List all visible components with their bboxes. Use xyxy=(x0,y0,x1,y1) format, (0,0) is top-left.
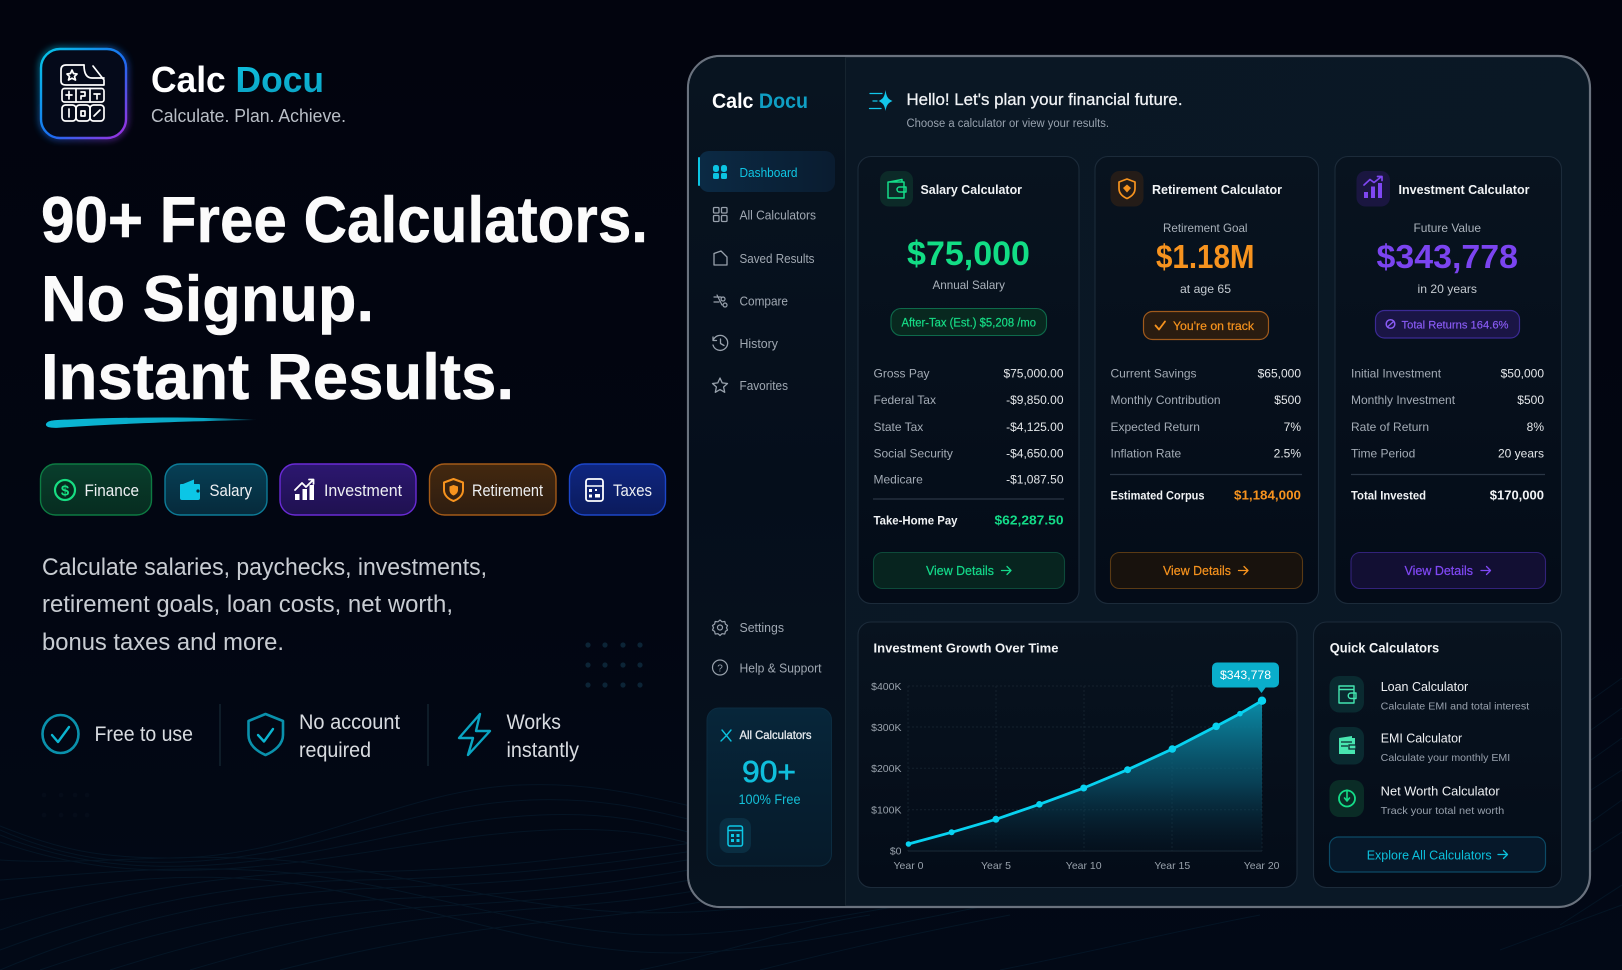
nav: All Calculators: All Calculators xyxy=(740,208,816,222)
investment rows: Time Period xyxy=(1351,446,1415,460)
feature: no account required: required xyxy=(299,738,371,762)
salary breakdown rows: Medicare xyxy=(874,472,923,486)
brand name: Calc Docu xyxy=(151,59,324,100)
nav: History xyxy=(713,335,779,351)
item: Loan Calculator: Loan Calculator xyxy=(1381,680,1468,694)
item: Net Worth Calculator: Net Worth Calculator xyxy=(1381,785,1500,799)
investment rows: $50,000 xyxy=(1501,366,1544,380)
feature: no account required: No account xyxy=(299,710,400,734)
nav: Saved Results xyxy=(714,251,814,266)
x axis labels: Year 15 xyxy=(1154,860,1190,872)
card: Investment Calculator: $343,778 xyxy=(1376,238,1518,275)
growth line xyxy=(906,696,1266,847)
pill: Salary xyxy=(165,464,267,515)
icon: shield xyxy=(1110,171,1144,206)
background wave lines xyxy=(0,678,1622,970)
retirement rows: Inflation Rate xyxy=(1110,446,1182,460)
greeting header xyxy=(870,90,1182,130)
item: Net Worth Calculator: Track your total net worth xyxy=(1381,805,1504,817)
greeting header: Hello! Let's plan your financial future. xyxy=(906,90,1182,109)
item: EMI Calculator xyxy=(1330,727,1510,764)
item: EMI Calculator: EMI Calculator xyxy=(1381,732,1462,746)
card: Retirement Calculator: Retirement Calculator xyxy=(1152,182,1282,197)
x axis labels: Year 5 xyxy=(981,860,1011,872)
feature: works instantly: instantly xyxy=(506,738,579,762)
investment rows: 8% xyxy=(1527,420,1544,434)
retirement rows: Monthly Contribution xyxy=(1110,393,1221,407)
calculator tile xyxy=(720,818,751,853)
estimated corpus: $1,184,000 xyxy=(1234,488,1301,502)
item: EMI Calculator: Calculate your monthly EMI xyxy=(1381,752,1510,764)
tagline: Calculate. Plan. Achieve. xyxy=(151,106,346,126)
y axis labels: $300K xyxy=(871,722,902,734)
nav: Compare xyxy=(714,294,788,308)
nav: Compare: Compare xyxy=(740,294,788,308)
nav: Help & Support: Help & Support xyxy=(740,662,822,676)
y axis labels: $400K xyxy=(871,681,902,693)
salary breakdown rows: -$1,087.50 xyxy=(1006,472,1064,486)
salary breakdown rows: -$9,850.00 xyxy=(1006,393,1064,407)
feature: no account required xyxy=(248,710,400,762)
sidebar brand: Calc Docu xyxy=(712,90,808,113)
total invested: Total Invested xyxy=(1351,488,1426,502)
nav: Dashboard active: Dashboard xyxy=(740,166,798,180)
y axis labels: $0 xyxy=(890,846,902,858)
card: Investment Calculator: in 20 years xyxy=(1418,282,1477,296)
item: Net Worth Calculator xyxy=(1330,780,1504,817)
investment rows: 20 years xyxy=(1498,446,1544,460)
card: Salary Calculator xyxy=(858,156,1079,604)
area under curve xyxy=(908,701,1262,851)
estimated corpus xyxy=(1110,488,1301,502)
button: view details: View Details xyxy=(1163,564,1231,578)
pill: Retirement: Retirement xyxy=(472,481,543,500)
salary breakdown rows: $75,000.00 xyxy=(1003,366,1064,380)
pill: Taxes xyxy=(570,464,666,515)
investment rows xyxy=(1351,366,1544,460)
button: explore all xyxy=(1330,837,1546,872)
investment rows: Monthly Investment xyxy=(1351,393,1456,407)
salary breakdown rows: Gross Pay xyxy=(874,366,930,380)
card: Retirement Calculator: $1.18M xyxy=(1156,238,1254,275)
description paragraph xyxy=(42,554,487,656)
sidebar xyxy=(689,57,846,906)
investment rows: Rate of Return xyxy=(1351,420,1429,434)
feature row xyxy=(42,704,579,766)
card: Salary Calculator: $75,000 xyxy=(907,235,1030,273)
item: Loan Calculator xyxy=(1330,676,1529,712)
description paragraph: Calculate salaries, paychecks, investments, xyxy=(42,554,487,581)
x axis labels xyxy=(894,860,1280,872)
nav: Settings: Settings xyxy=(740,621,784,635)
button: view details: View Details xyxy=(926,564,994,578)
pill: Investment: Investment xyxy=(324,481,402,500)
logo icon xyxy=(41,49,126,138)
tooltip: $343,778 xyxy=(1220,668,1271,682)
badge: total returns: Total Returns 164.6% xyxy=(1402,320,1509,332)
pill: Investment xyxy=(280,464,416,515)
grid xyxy=(908,686,1262,851)
investment rows: $500 xyxy=(1517,393,1544,407)
salary breakdown rows: -$4,650.00 xyxy=(1006,446,1064,460)
headline underline swoosh xyxy=(46,418,256,428)
greeting header: Choose a calculator or view your results. xyxy=(906,118,1109,130)
card: Investment Calculator: Investment Calculator xyxy=(1398,182,1530,197)
pill: Salary: Salary xyxy=(210,481,252,500)
retirement rows: $65,000 xyxy=(1258,366,1301,380)
nav: Help & Support: ? xyxy=(717,664,723,674)
headline xyxy=(41,183,648,413)
icon: growth chart xyxy=(1356,171,1390,206)
button: view details: View Details xyxy=(1404,564,1473,578)
all calculators card: 90+ xyxy=(742,754,796,789)
panel: investment growth chart: Investment Growth Over Time xyxy=(874,641,1058,656)
feature: free to use xyxy=(42,715,193,753)
retirement rows: 7% xyxy=(1284,420,1301,434)
all calculators card: 100% Free xyxy=(738,792,800,807)
pill: Retirement xyxy=(430,464,556,515)
y axis labels: $100K xyxy=(871,804,902,816)
pill: Finance: Finance xyxy=(84,481,139,500)
card: Salary Calculator: Salary Calculator xyxy=(920,182,1022,197)
badge: after-tax xyxy=(891,308,1046,336)
salary breakdown rows xyxy=(874,366,1064,486)
headline: 90+ Free Calculators. xyxy=(41,183,648,256)
card: Retirement Calculator: Retirement Goal xyxy=(1163,221,1248,235)
panel: investment growth chart xyxy=(858,622,1297,888)
dashboard panel xyxy=(688,56,1590,907)
salary breakdown rows: Social Security xyxy=(874,446,953,460)
nav: Settings xyxy=(712,620,784,636)
feature: works instantly: Works xyxy=(506,710,561,734)
all calculators card xyxy=(707,708,832,866)
y axis labels xyxy=(871,681,902,858)
button: view details xyxy=(1110,552,1302,588)
panel: quick calculators: Quick Calculators xyxy=(1330,641,1439,656)
pill: Taxes: Taxes xyxy=(613,481,652,500)
button: view details xyxy=(1351,552,1546,588)
icon: wallet xyxy=(880,171,913,206)
card: Investment Calculator: Future Value xyxy=(1414,221,1481,235)
y axis labels: $200K xyxy=(871,763,902,775)
retirement rows: Current Savings xyxy=(1110,366,1197,380)
retirement rows: 2.5% xyxy=(1274,446,1301,460)
decorative dot grid xyxy=(42,642,643,817)
take-home pay: Take-Home Pay xyxy=(874,514,958,528)
description paragraph: bonus taxes and more. xyxy=(42,629,284,656)
button: explore all: Explore All Calculators xyxy=(1367,848,1492,862)
badge: on track: You're on track xyxy=(1173,319,1255,333)
nav: All Calculators xyxy=(714,208,816,222)
card: Investment Calculator xyxy=(1335,156,1562,604)
salary breakdown rows: State Tax xyxy=(874,420,923,434)
panel: quick calculators xyxy=(1314,622,1562,888)
badge: on track xyxy=(1144,312,1268,340)
salary breakdown rows: Federal Tax xyxy=(874,393,936,407)
item: Loan Calculator: Calculate EMI and total interest xyxy=(1381,700,1529,712)
description paragraph: retirement goals, loan costs, net worth, xyxy=(42,591,453,618)
take-home pay xyxy=(874,512,1064,528)
card: Retirement Calculator xyxy=(1095,156,1318,604)
nav: Help & Support xyxy=(712,660,822,676)
salary breakdown rows: -$4,125.00 xyxy=(1006,420,1064,434)
investment rows: Initial Investment xyxy=(1351,366,1442,380)
headline: No Signup. xyxy=(41,262,374,335)
pill: Finance: $ xyxy=(61,482,70,500)
nav: Favorites xyxy=(712,378,788,393)
tooltip xyxy=(1212,662,1279,693)
retirement rows: Expected Return xyxy=(1110,420,1200,434)
card: Retirement Calculator: at age 65 xyxy=(1180,282,1231,296)
icon: sparkle xyxy=(870,90,892,111)
nav: Favorites: Favorites xyxy=(740,379,788,393)
button: view details xyxy=(874,552,1064,588)
x axis labels: Year 10 xyxy=(1066,860,1102,872)
badge: total returns xyxy=(1376,310,1520,338)
take-home pay: $62,287.50 xyxy=(994,512,1064,528)
x axis labels: Year 20 xyxy=(1244,860,1280,872)
feature: free to use: Free to use xyxy=(94,722,193,746)
nav: History: History xyxy=(740,337,779,351)
x axis labels: Year 0 xyxy=(894,860,924,872)
feature: works instantly xyxy=(459,710,579,762)
pill: Finance xyxy=(40,464,152,515)
nav: Saved Results: Saved Results xyxy=(740,252,814,266)
retirement rows xyxy=(1110,366,1301,460)
headline: Instant Results. xyxy=(41,340,514,413)
nav: Dashboard active xyxy=(698,151,835,192)
total invested xyxy=(1351,488,1544,502)
all calculators card: All Calculators xyxy=(740,728,812,742)
total invested: $170,000 xyxy=(1490,488,1544,502)
retirement rows: $500 xyxy=(1274,393,1301,407)
category pills xyxy=(40,464,666,515)
card: Salary Calculator: Annual Salary xyxy=(932,278,1005,292)
badge: after-tax: After-Tax (Est.) $5,208 /mo xyxy=(902,318,1036,330)
estimated corpus: Estimated Corpus xyxy=(1110,488,1205,502)
